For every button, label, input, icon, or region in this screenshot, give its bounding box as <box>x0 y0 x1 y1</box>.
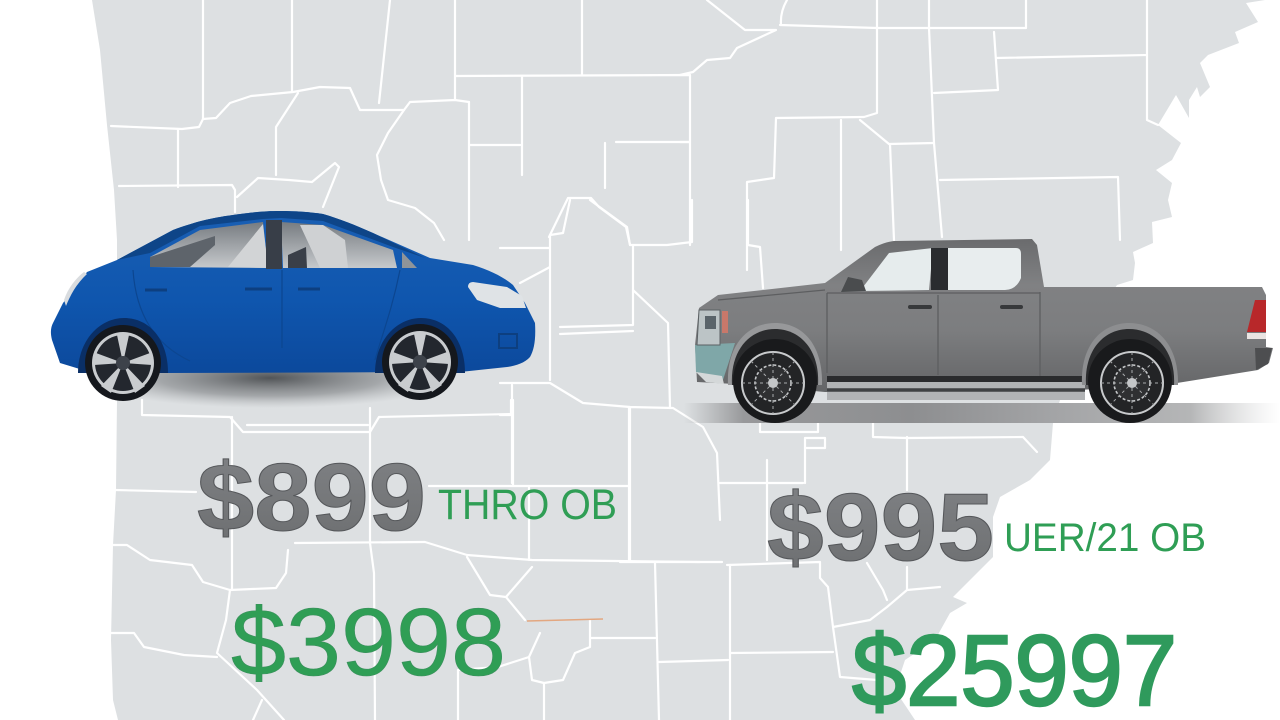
front wheel <box>728 323 822 423</box>
front wheel <box>375 318 465 400</box>
rear light <box>64 272 87 306</box>
rear window <box>150 222 268 268</box>
mirror <box>841 277 866 292</box>
price: car gray: $899 <box>197 444 426 551</box>
truck body <box>695 239 1273 392</box>
windows <box>860 248 933 291</box>
label: truck price note: UER/21 OB <box>1004 516 1206 560</box>
door lines and handles <box>133 270 400 361</box>
orange stray line <box>527 619 603 621</box>
small window <box>402 252 417 268</box>
door lines and handles <box>718 290 1040 376</box>
sedan car, blue <box>51 211 535 408</box>
wheel arch <box>728 323 822 385</box>
price: car green: $3998 <box>231 589 506 696</box>
car roof dark band <box>117 211 425 260</box>
seat <box>288 247 307 268</box>
windows <box>150 222 417 268</box>
pickup truck, gray <box>684 239 1280 423</box>
label: car price note: THRO OB <box>438 481 617 529</box>
rear bumper <box>1255 348 1272 370</box>
price: truck gray: $995 <box>767 474 994 581</box>
car shadow <box>85 348 455 408</box>
truck shadow <box>684 403 1280 423</box>
wheel arch <box>1082 323 1178 385</box>
pillar <box>266 220 282 269</box>
grille and light <box>697 310 720 345</box>
headlight <box>468 282 526 308</box>
front marker <box>499 334 517 348</box>
front window <box>281 222 397 268</box>
running board <box>827 378 1085 400</box>
rear wheel <box>78 318 168 401</box>
truck front lower bumper <box>695 343 735 383</box>
rear wheel <box>1082 323 1178 423</box>
car body <box>51 211 535 373</box>
tail light <box>1247 300 1266 332</box>
B pillar <box>931 248 948 290</box>
